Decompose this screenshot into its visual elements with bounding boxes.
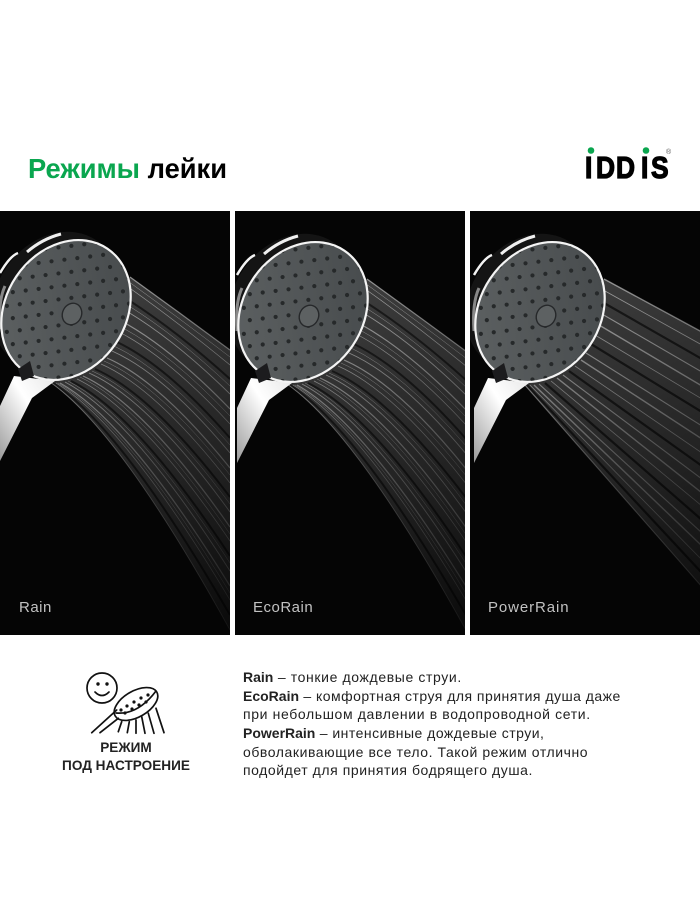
icon caption: ПОД НАСТРОЕНИЕ [62, 758, 190, 773]
description text [243, 669, 621, 778]
label: Rain: Rain [19, 599, 52, 616]
description text: EcoRain – комфортная струя для принятия душа даже [243, 688, 621, 704]
description text: обволакивающие все тело. Такой режим отлично [243, 744, 588, 760]
panel: Rain [0, 211, 230, 635]
icon caption: РЕЖИМ [100, 740, 152, 754]
title: Режимы лейки [28, 153, 227, 184]
panel: PowerRain [470, 211, 700, 635]
icon: smiley and shower head [86, 672, 165, 734]
photo: shower head with PowerRain spray [470, 234, 700, 586]
panel: EcoRain [234, 211, 464, 635]
description text: при небольшом давлении в водопроводной сети. [243, 706, 591, 722]
label: PowerRain: PowerRain [488, 599, 569, 616]
logo: IDDIS: ® [666, 148, 672, 156]
description text: Rain – тонкие дождевые струи. [243, 669, 462, 685]
description text: PowerRain – интенсивные дождевые струи, [243, 725, 544, 741]
description text: подойдет для принятия бодрящего душа. [243, 762, 533, 778]
photo: shower head with EcoRain spray [235, 234, 465, 629]
photo: shower head with Rain spray [0, 232, 230, 630]
label: EcoRain: EcoRain [253, 599, 313, 616]
icon caption [62, 740, 190, 773]
